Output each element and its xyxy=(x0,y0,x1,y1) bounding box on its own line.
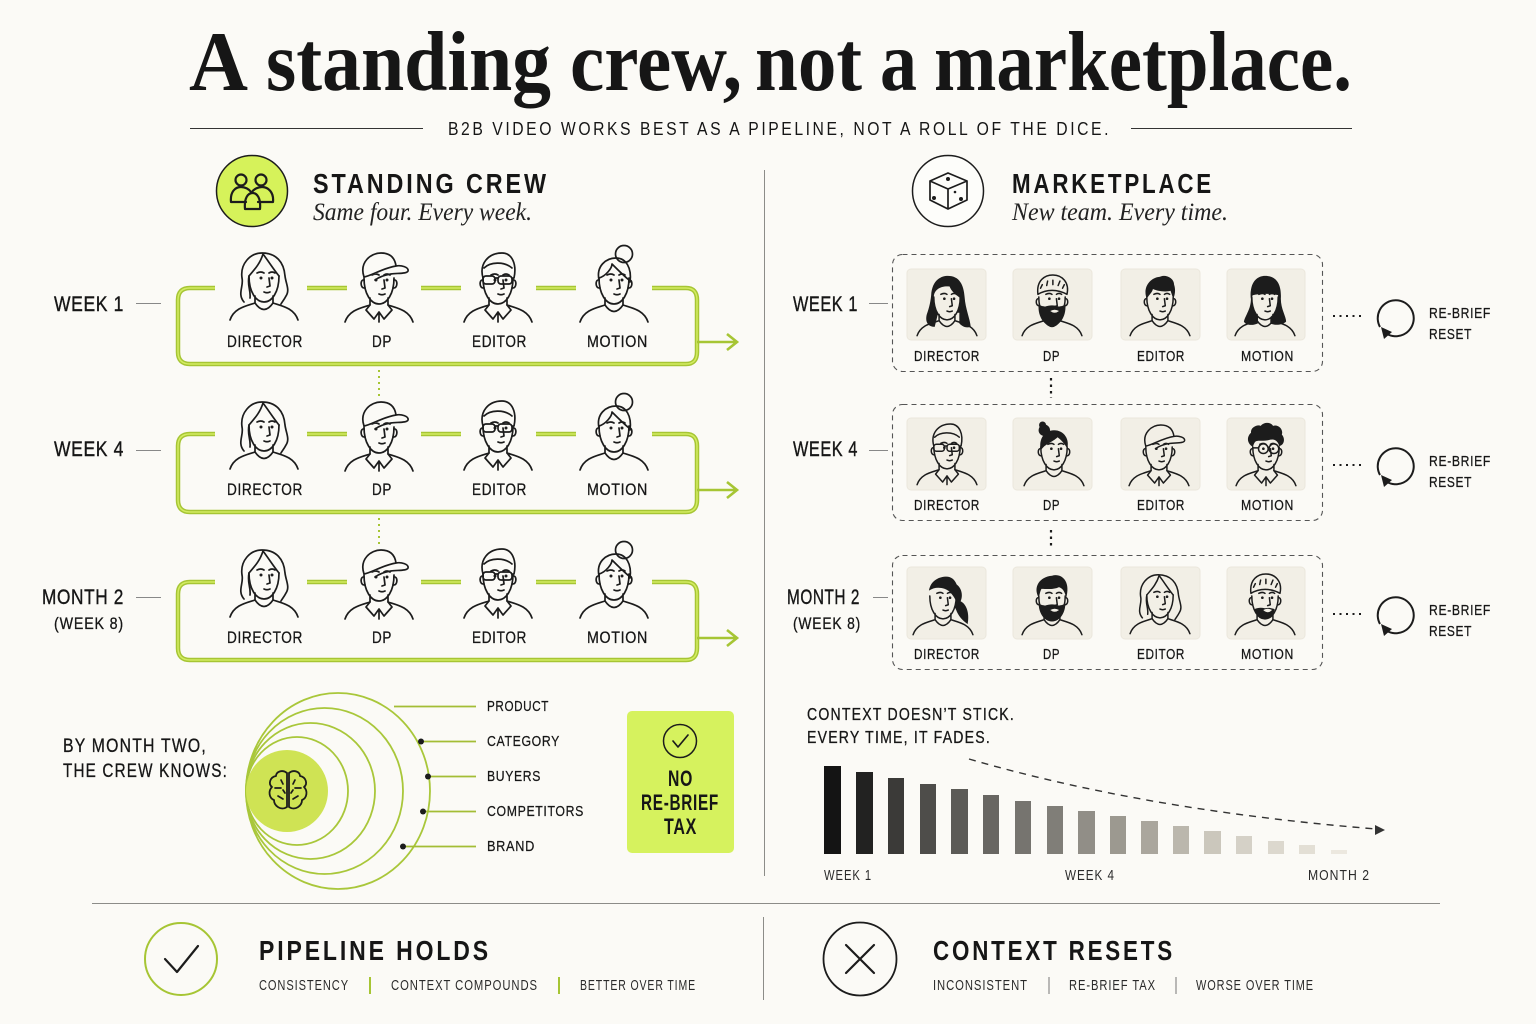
crew row: month 2: MOTION xyxy=(587,629,648,647)
title xyxy=(189,15,1352,109)
team row: week 4: DIRECTOR xyxy=(914,497,980,514)
crew row: week 1 xyxy=(54,246,737,364)
crew row: week 1: MOTION xyxy=(587,333,648,351)
outcome: context resets xyxy=(824,922,1314,996)
bar chart: context fades: MONTH 2 xyxy=(1308,868,1370,884)
crew row: week 4 xyxy=(54,394,737,512)
team row: month 2: (WEEK 8) xyxy=(793,614,861,633)
team row: week 1: DIRECTOR xyxy=(914,348,980,365)
team row: week 1: WEEK 1 xyxy=(793,292,858,316)
team row: week 4: MOTION xyxy=(1241,497,1294,514)
crew row: week 4: MOTION xyxy=(587,481,648,499)
team row: week 1: MOTION xyxy=(1241,348,1294,365)
outcome: context resets: RE-BRIEF TAX xyxy=(1069,978,1156,994)
title: a xyxy=(880,15,917,109)
title: marketplace. xyxy=(934,15,1352,109)
outcome: pipeline holds: CONSISTENCY xyxy=(259,978,349,994)
crew row: week 1: WEEK 1 xyxy=(54,292,124,316)
subtitle with rules: B2B VIDEO WORKS BEST AS A PIPELINE, NOT A ROLL OF THE DICE. xyxy=(448,118,1111,139)
knowledge diagram: BUYERS xyxy=(487,768,541,785)
title: not xyxy=(755,15,862,109)
team row: month 2: RESET xyxy=(1429,623,1472,640)
bar chart: context fades: WEEK 1 xyxy=(824,868,872,884)
crew row: week 1: EDITOR xyxy=(472,333,527,351)
crew row: week 4: WEEK 4 xyxy=(54,437,124,461)
team row: week 4 xyxy=(793,404,1491,520)
callout: no re-brief tax: RE-BRIEF xyxy=(641,790,719,815)
team row: month 2: MOTION xyxy=(1241,646,1294,663)
outcome: pipeline holds: BETTER OVER TIME xyxy=(580,978,696,994)
team row: month 2: MONTH 2 xyxy=(787,585,860,609)
team row: week 1: EDITOR xyxy=(1137,348,1185,365)
team row: week 1: RE-BRIEF xyxy=(1429,305,1491,322)
bar chart: context fades xyxy=(807,704,1385,884)
team row: month 2: DIRECTOR xyxy=(914,646,980,663)
callout: no re-brief tax: TAX xyxy=(664,814,697,839)
callout: no re-brief tax xyxy=(627,711,734,853)
outcome: context resets: INCONSISTENT xyxy=(933,978,1028,994)
title: A xyxy=(189,15,248,109)
team row: week 4: RE-BRIEF xyxy=(1429,453,1491,470)
team row: week 1 xyxy=(793,254,1491,372)
heading: standing crew: Same four. Every week. xyxy=(313,199,532,226)
team row: week 4: RESET xyxy=(1429,474,1472,491)
knowledge diagram: PRODUCT xyxy=(487,698,549,715)
bar chart: context fades: EVERY TIME, IT FADES. xyxy=(807,727,991,747)
crew row: week 4: DIRECTOR xyxy=(227,481,303,499)
title: standing xyxy=(266,15,551,109)
crew row: month 2: DIRECTOR xyxy=(227,629,303,647)
crew row: week 1: DIRECTOR xyxy=(227,333,303,351)
outcome: pipeline holds: PIPELINE HOLDS xyxy=(259,935,491,966)
knowledge diagram: COMPETITORS xyxy=(487,803,584,820)
outcome: context resets: WORSE OVER TIME xyxy=(1196,978,1314,994)
team row: month 2: EDITOR xyxy=(1137,646,1185,663)
crew row: month 2: DP xyxy=(372,629,392,647)
team row: month 2 xyxy=(787,556,1491,670)
team row: week 4: EDITOR xyxy=(1137,497,1185,514)
knowledge diagram: BY MONTH TWO, xyxy=(63,735,207,757)
outcome: context resets: CONTEXT RESETS xyxy=(933,935,1175,966)
crew row: week 4: EDITOR xyxy=(472,481,527,499)
title: crew, xyxy=(570,15,742,109)
knowledge diagram: BRAND xyxy=(487,838,535,855)
heading: standing crew: STANDING CREW xyxy=(313,168,549,199)
knowledge diagram: THE CREW KNOWS: xyxy=(63,760,228,782)
crew row: month 2: (WEEK 8) xyxy=(54,614,124,633)
knowledge diagram: CATEGORY xyxy=(487,733,560,750)
knowledge diagram xyxy=(63,693,584,889)
crew row: week 4: DP xyxy=(372,481,392,499)
team row: month 2: RE-BRIEF xyxy=(1429,602,1491,619)
crew row: week 1: DP xyxy=(372,333,392,351)
outcome: pipeline holds: CONTEXT COMPOUNDS xyxy=(391,978,538,994)
callout: no re-brief tax: NO xyxy=(668,766,693,791)
heading: marketplace: MARKETPLACE xyxy=(1012,168,1214,199)
team row: week 1: RESET xyxy=(1429,326,1472,343)
bar chart: context fades: WEEK 4 xyxy=(1065,868,1115,884)
heading: standing crew xyxy=(216,156,549,226)
team row: month 2: DP xyxy=(1043,646,1060,663)
panel: marketplace xyxy=(787,156,1491,884)
icon: brain xyxy=(270,771,306,808)
heading: marketplace xyxy=(912,156,1228,226)
team row: week 4: WEEK 4 xyxy=(793,437,858,461)
team row: week 1: DP xyxy=(1043,348,1060,365)
outcome: pipeline holds xyxy=(145,923,696,995)
bar chart: context fades: CONTEXT DOESN’T STICK. xyxy=(807,704,1015,724)
crew row: month 2: MONTH 2 xyxy=(42,585,124,609)
heading: marketplace: New team. Every time. xyxy=(1011,199,1228,226)
crew row: month 2 xyxy=(42,542,737,660)
crew row: month 2: EDITOR xyxy=(472,629,527,647)
panel: standing crew xyxy=(42,156,737,889)
team row: week 4: DP xyxy=(1043,497,1060,514)
